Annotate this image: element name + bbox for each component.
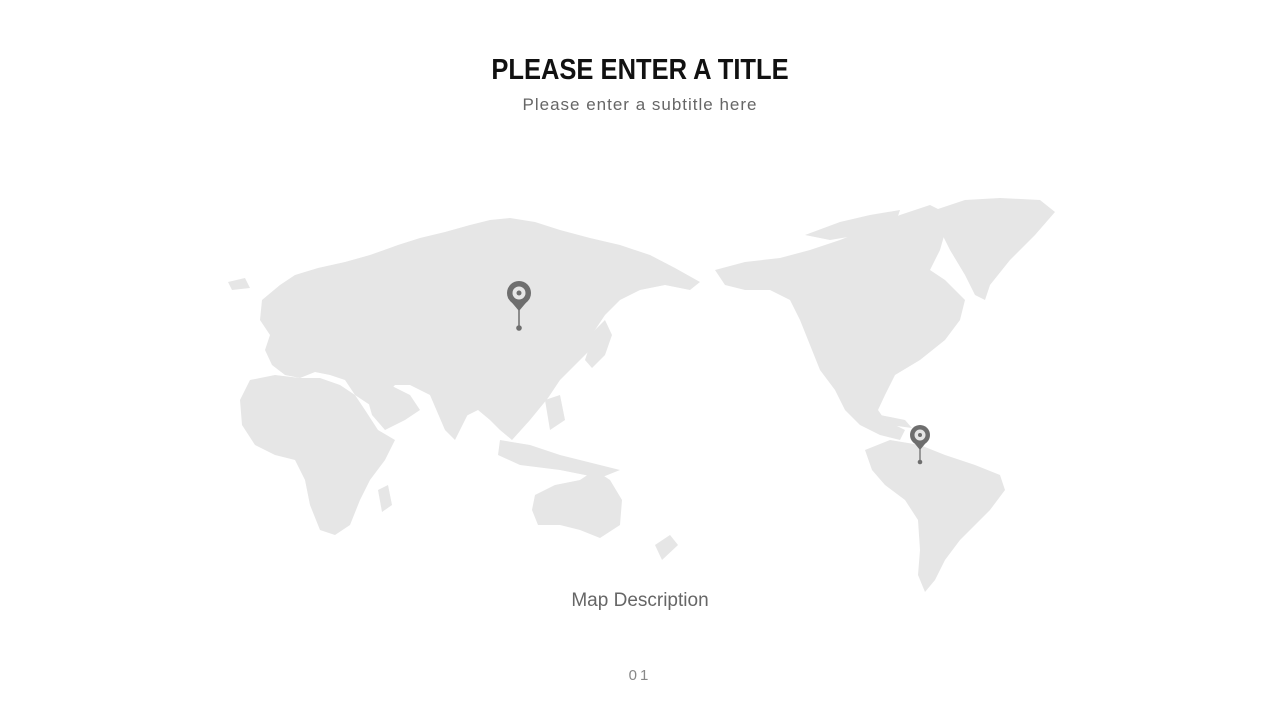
Arabia/India: [365, 385, 420, 430]
pin: Colombia: [910, 425, 930, 464]
Australia: [532, 470, 622, 538]
Greenland: [935, 198, 1055, 300]
arctic islands: [805, 210, 900, 240]
Iceland: [228, 278, 250, 290]
title: PLEASE ENTER A TITLE: [491, 54, 789, 86]
Caribbean: [880, 415, 912, 428]
Eurasia: [260, 218, 700, 440]
South America: [865, 440, 1005, 592]
pin: Russia: [507, 281, 531, 331]
page number: 01: [629, 667, 651, 684]
Africa: [240, 375, 395, 535]
SE Asia islands: [498, 440, 620, 478]
Japan: [585, 320, 612, 368]
subtitle: Please enter a subtitle here: [523, 95, 757, 114]
UK: [265, 305, 282, 330]
North America: [715, 205, 965, 440]
map description: Map Description: [571, 590, 709, 611]
